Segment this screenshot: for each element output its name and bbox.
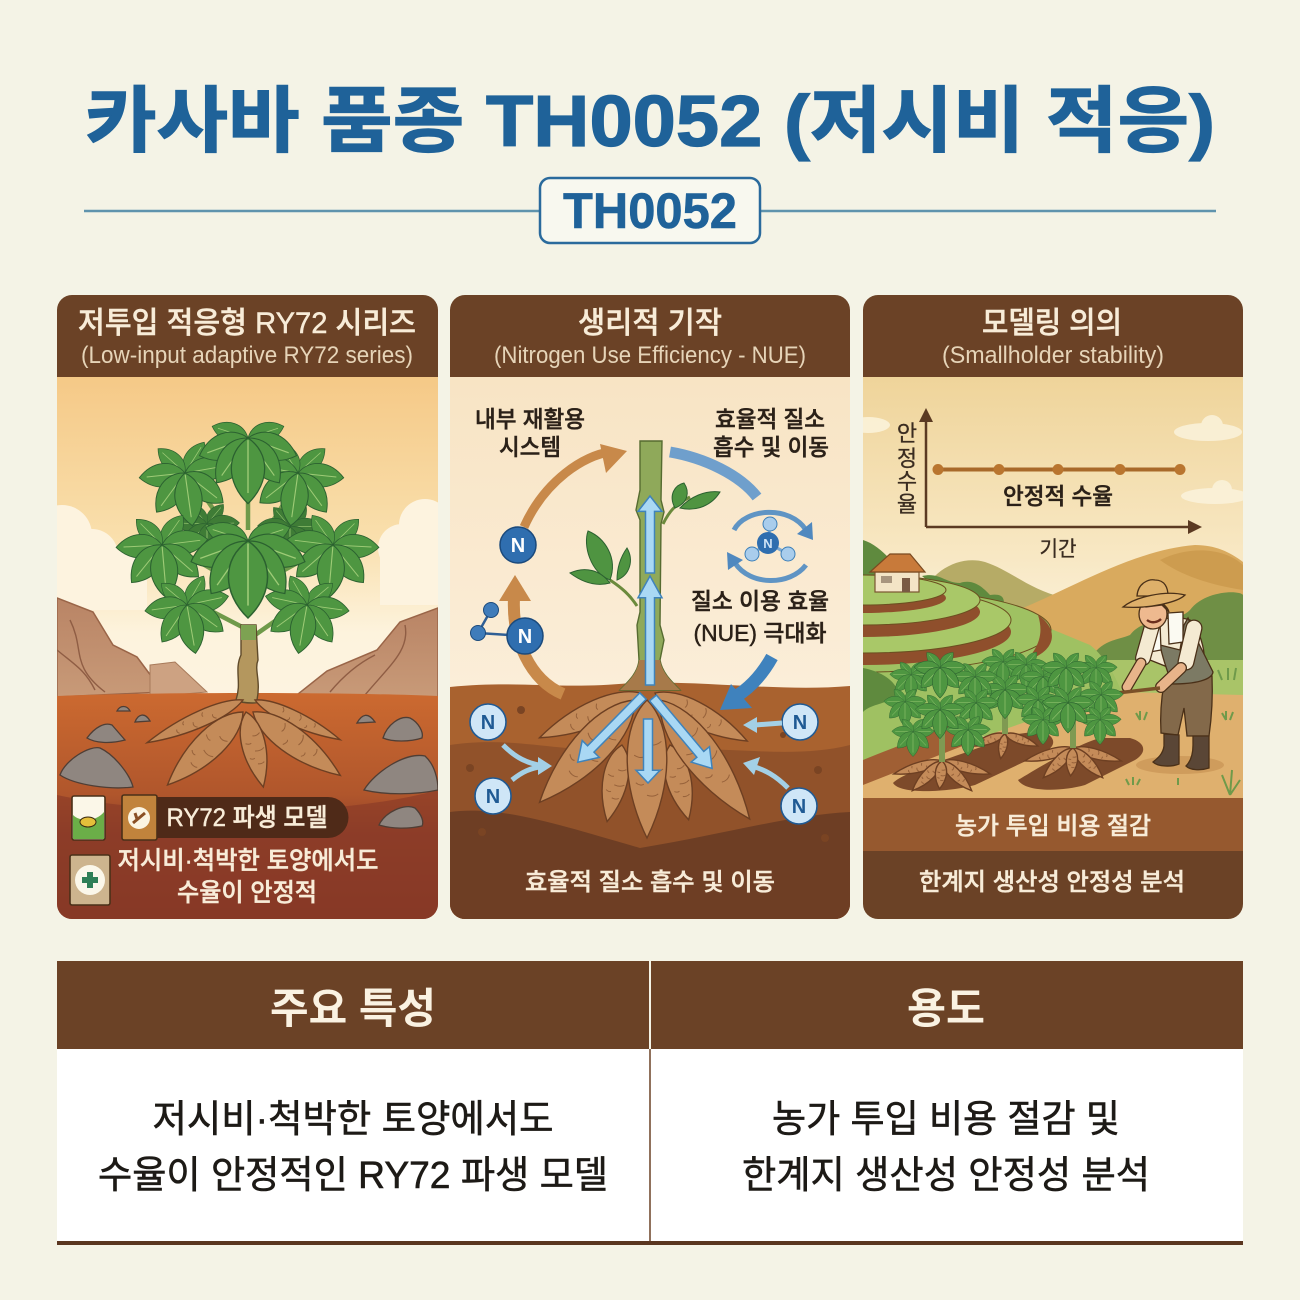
panel header 1: (Low-input adaptive RY72 series) <box>81 342 413 369</box>
labels: (NUE) 극대화 <box>694 620 826 646</box>
icon: nitrogen cycle: N <box>763 536 773 551</box>
table header left <box>57 961 649 1049</box>
band: cost saving <box>863 798 1243 851</box>
chart: stable yield <box>897 408 1202 561</box>
farmer arms <box>1127 626 1194 687</box>
nitrogen molecule <box>470 602 543 654</box>
caption: 효율적 질소 흡수 및 이동 <box>525 869 775 896</box>
yield line <box>932 464 1186 475</box>
table cell left: 저시비·척박한 토양에서도 <box>152 1099 554 1141</box>
panel header 2 <box>450 295 850 377</box>
rocks <box>60 706 438 828</box>
leaves <box>884 646 1124 757</box>
soil nitrogen nodes and arrows: N <box>793 712 807 734</box>
panel header 3 <box>863 295 1243 377</box>
table cell right: 한계지 생산성 안정성 분석 <box>742 1155 1150 1197</box>
roots <box>892 730 1123 795</box>
table header right: 용도 <box>907 985 985 1032</box>
labels <box>475 406 829 646</box>
band: cost saving: 농가 투입 비용 절감 <box>955 813 1151 840</box>
table cell right <box>742 1099 1150 1197</box>
cassava plants <box>884 646 1124 795</box>
panel scene: background <box>450 377 850 697</box>
farmer legs and boots <box>1153 676 1212 770</box>
nitrogen molecule: N <box>518 626 532 648</box>
arrows: transport in stem and roots <box>569 496 721 783</box>
farmer head and hat <box>1123 580 1185 629</box>
ground soil <box>57 693 438 919</box>
icon: orange fertilizer bag <box>122 795 157 840</box>
stems <box>942 697 1073 762</box>
table cell left <box>98 1099 608 1197</box>
band: marginal land analysis: 한계지 생산성 안정성 분석 <box>919 869 1185 896</box>
panel: physiological mechanism <box>450 377 850 919</box>
panel: low-input adaptive RY72 series <box>32 377 451 919</box>
labels: 시스템 <box>499 434 561 460</box>
table body <box>57 1049 1243 1241</box>
soil layers <box>450 683 850 919</box>
caption <box>118 847 378 907</box>
leaves: front <box>113 417 382 661</box>
y-axis label: 안 <box>897 421 917 446</box>
panel scene: sky <box>57 377 438 697</box>
badge: RY72 derived model <box>157 797 348 838</box>
caption: 저시비·척박한 토양에서도 <box>118 847 378 875</box>
labels: 흡수 및 이동 <box>713 434 829 460</box>
arrow: orange recycling arc upper <box>524 444 627 527</box>
soil nitrogen nodes and arrows: N <box>481 712 495 734</box>
panel header 3: (Smallholder stability) <box>942 342 1164 369</box>
panel: modelling significance <box>863 377 1243 919</box>
side leaves <box>570 483 720 606</box>
subtitle badge: TH0052 <box>84 178 1216 243</box>
y-axis label: 율 <box>897 492 917 517</box>
labels: 효율적 질소 <box>715 406 825 432</box>
arrow: blue arc upper <box>670 452 757 497</box>
farmer <box>1117 580 1240 795</box>
icon: green seed bag <box>72 796 105 840</box>
tubers <box>538 691 751 840</box>
clouds <box>846 415 1249 504</box>
chart line label: 안정적 수율 <box>1003 483 1113 509</box>
y-axis label: 정 <box>897 446 917 471</box>
table header right <box>651 961 1243 1049</box>
panel header 2: (Nitrogen Use Efficiency - NUE) <box>494 342 806 369</box>
band: marginal land analysis <box>863 851 1243 919</box>
farmer shirt and apron <box>1146 612 1213 684</box>
arrow: orange recycling arc lower <box>499 575 563 694</box>
ground and furrows <box>863 692 1243 800</box>
title: 카사바 품종 TH0052 (저시비 적응) <box>85 82 1215 162</box>
icon: farmhouse <box>870 554 925 592</box>
badge: RY72 derived model: RY72 파생 모델 <box>166 804 328 832</box>
axes <box>919 408 1202 534</box>
soil nitrogen nodes and arrows: N <box>792 796 806 818</box>
icon: nitrogen cycle <box>727 512 813 581</box>
leaves: back <box>182 504 313 540</box>
panel header 1: 저투입 적응형 RY72 시리즈 <box>78 307 416 340</box>
farmer tool <box>1117 688 1160 693</box>
panel header 3: 모델링 의의 <box>982 307 1122 340</box>
table: characteristics and uses <box>57 961 1243 1243</box>
x-axis label: 기간 <box>1040 538 1076 561</box>
tubers <box>144 699 342 788</box>
table cell right: 농가 투입 비용 절감 및 <box>772 1099 1120 1141</box>
terraces <box>863 574 1120 760</box>
labels: 질소 이용 효율 <box>691 588 829 614</box>
bushes <box>863 540 1004 602</box>
sky <box>863 377 1243 594</box>
stem and branches <box>192 502 298 704</box>
hills <box>920 545 1243 700</box>
panel header 2: 생리적 기작 <box>578 307 722 340</box>
nitrogen node upper <box>500 527 536 563</box>
grass tufts <box>1126 668 1240 795</box>
nitrogen node upper: N <box>511 535 525 557</box>
soil nitrogen nodes and arrows: N <box>486 786 500 808</box>
labels: 내부 재활용 <box>475 406 585 432</box>
y-axis label <box>897 421 917 517</box>
table header left: 주요 특성 <box>270 985 436 1032</box>
y-axis label: 수 <box>897 469 917 494</box>
arrow: blue arc lower <box>720 657 772 710</box>
icon: beige fertilizer bag <box>70 855 110 905</box>
subtitle badge: TH0052: TH0052 <box>563 183 737 239</box>
panel header 1 <box>57 295 438 377</box>
stem <box>620 441 680 690</box>
soil nitrogen nodes and arrows <box>470 704 818 824</box>
mountains <box>57 598 438 697</box>
caption: 수율이 안정적 <box>177 879 317 907</box>
plant: cassava <box>113 417 382 703</box>
table cell left: 수율이 안정적인 RY72 파생 모델 <box>98 1155 608 1197</box>
clouds <box>32 499 451 610</box>
